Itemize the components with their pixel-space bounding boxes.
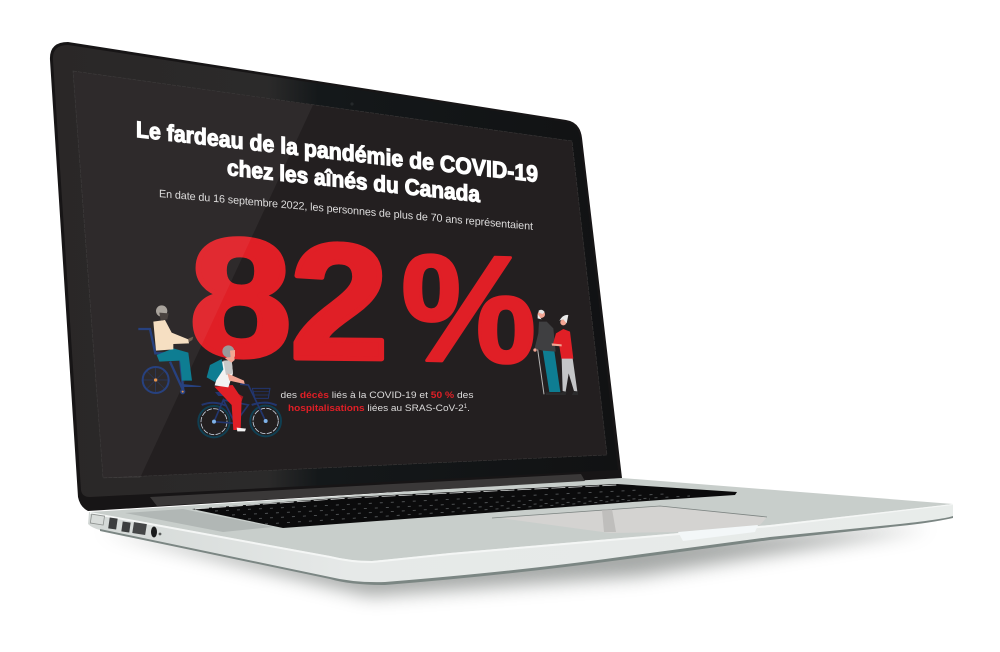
body text: .	[467, 403, 470, 414]
bezel	[53, 45, 618, 497]
body text	[280, 390, 474, 414]
title: Le fardeau de la pandémie de COVID-19	[136, 116, 538, 187]
big number 82 %: 2	[290, 210, 389, 394]
laptop base	[88, 478, 953, 585]
laptop lid	[50, 42, 622, 511]
screen	[73, 71, 607, 478]
shadow under laptop	[100, 528, 930, 596]
webcam	[350, 102, 354, 106]
speaker texture	[125, 509, 273, 532]
big number 82 %: %	[401, 223, 536, 396]
ports	[90, 514, 161, 538]
deck surface	[90, 478, 953, 561]
icon: elderly couple	[533, 310, 578, 395]
deck front highlight	[90, 504, 953, 563]
lid outer	[50, 42, 622, 511]
body text: des décès liés à la COVID-19 et 50 % des	[280, 390, 474, 401]
hinge bar	[150, 474, 585, 506]
subtitle: En date du 16 septembre 2022, les personnes de plus de 70 ans représentaient	[159, 188, 533, 233]
big number 82 %	[190, 204, 536, 396]
screen gloss	[73, 71, 313, 478]
icon: man in wheelchair	[138, 305, 202, 394]
thumb notch	[678, 525, 758, 541]
base front edge	[88, 505, 953, 583]
big number 82 %: 8	[190, 204, 292, 393]
base underside line	[100, 516, 953, 585]
trackpad	[492, 506, 767, 533]
icon: woman on bicycle	[198, 345, 281, 437]
body text: 1	[464, 404, 468, 410]
title: chez les aînés du Canada	[227, 155, 480, 207]
keyboard	[192, 484, 737, 528]
body text: hospitalisations liées au SRAS-CoV-2	[288, 403, 459, 414]
